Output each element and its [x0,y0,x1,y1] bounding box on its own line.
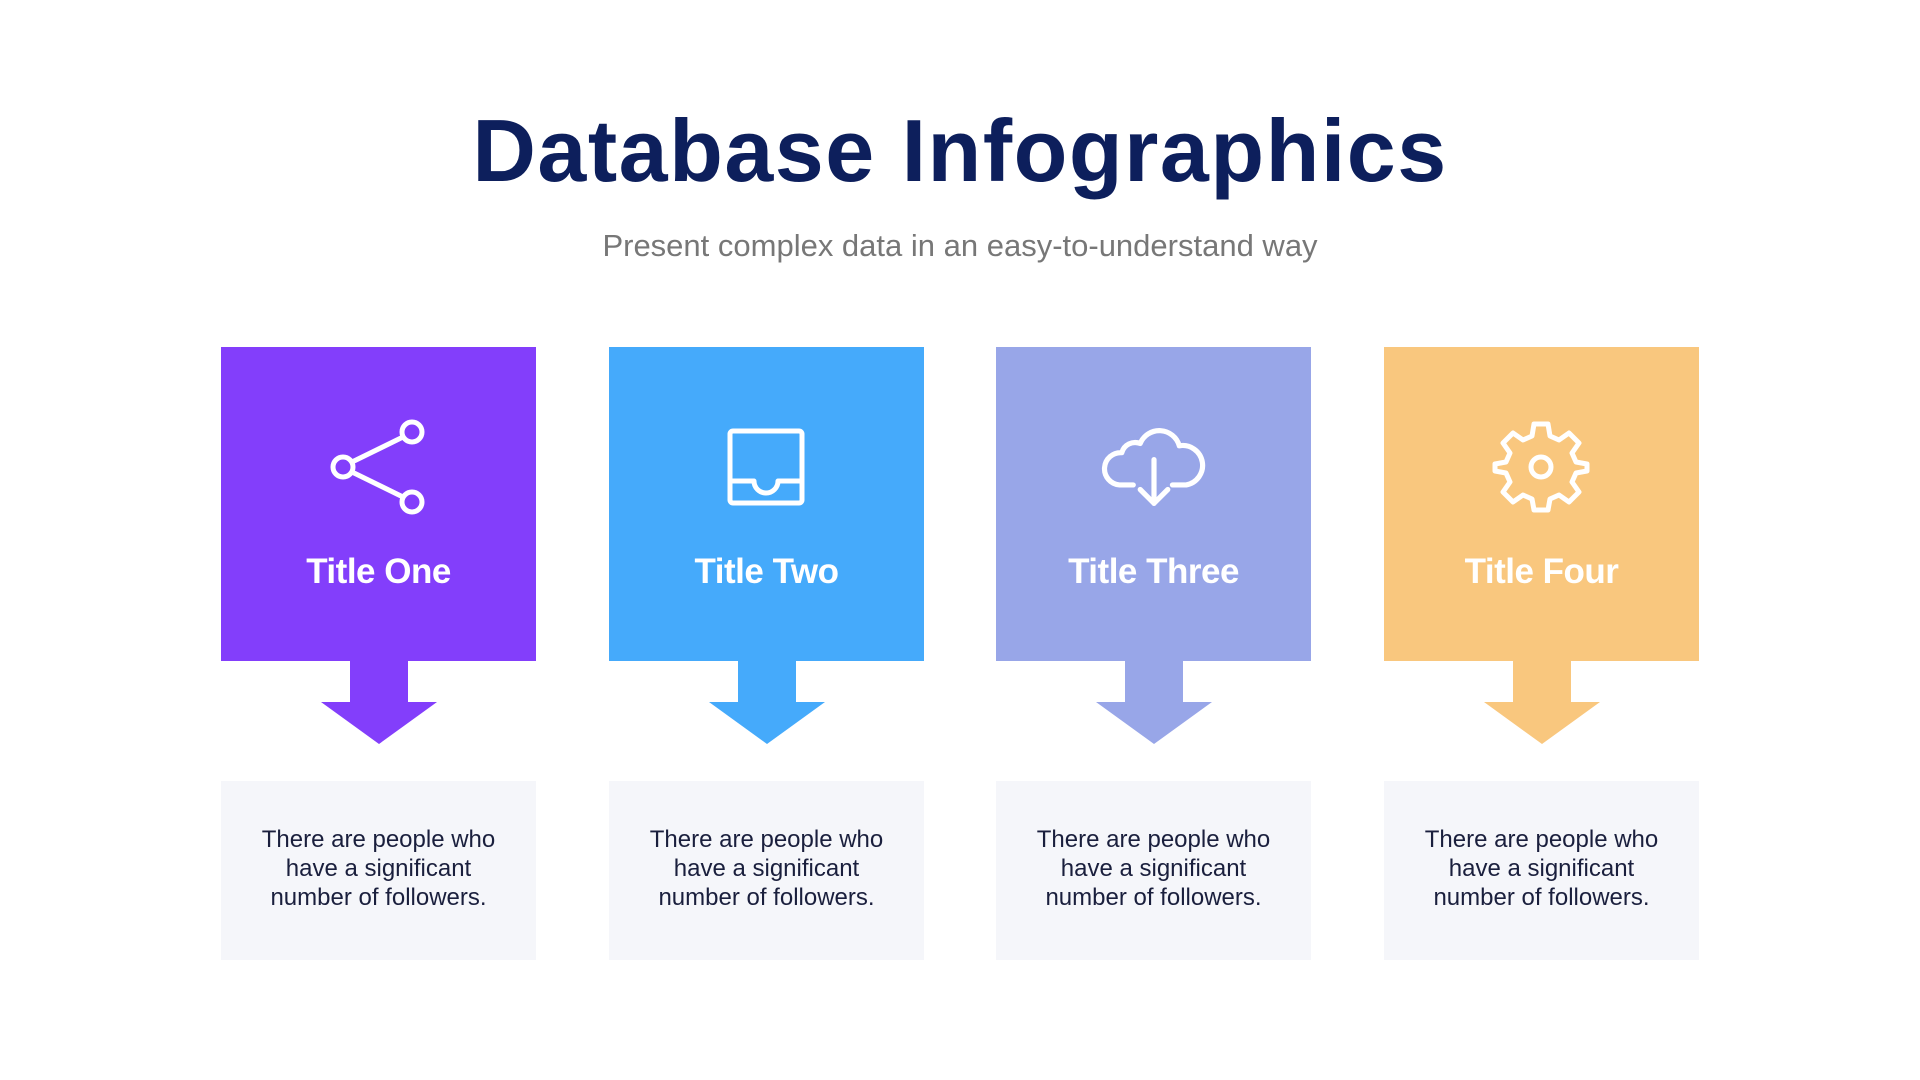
icon: share [330,420,424,514]
heading: Title Four [1465,552,1618,591]
icon: cloud download [1102,428,1206,506]
panel: title one [221,347,536,661]
text block: four: There are people who [1425,826,1658,853]
text block: four: have a significant [1449,855,1634,882]
heading: Title One [306,552,451,591]
text block: two: number of followers. [658,884,875,911]
arrow: one [321,661,437,744]
title: Database Infographics [472,101,1448,200]
text block: three: There are people who [1037,826,1270,853]
text block: one [221,781,536,960]
panel: title three [996,347,1311,661]
text block: three [996,781,1311,960]
text block: one: number of followers. [270,884,487,911]
text block: one: have a significant [286,855,471,882]
icon: inbox [728,428,804,506]
arrow: two [709,661,825,744]
subtitle: Present complex data in an easy-to-understand way [602,228,1318,263]
arrow: four [1484,661,1600,744]
heading: Title Two [695,552,838,591]
text block: three: number of followers. [1045,884,1262,911]
icon: gear [1492,422,1590,512]
text block: four [1384,781,1699,960]
arrow: three [1096,661,1212,744]
text block: four: number of followers. [1433,884,1650,911]
text block: one: There are people who [262,826,495,853]
text block: two: There are people who [650,826,883,853]
panel: title four [1384,347,1699,661]
text block: two [609,781,924,960]
text block: three: have a significant [1061,855,1246,882]
panel: title two [609,347,924,661]
text block: two: have a significant [674,855,859,882]
heading: Title Three [1068,552,1239,591]
